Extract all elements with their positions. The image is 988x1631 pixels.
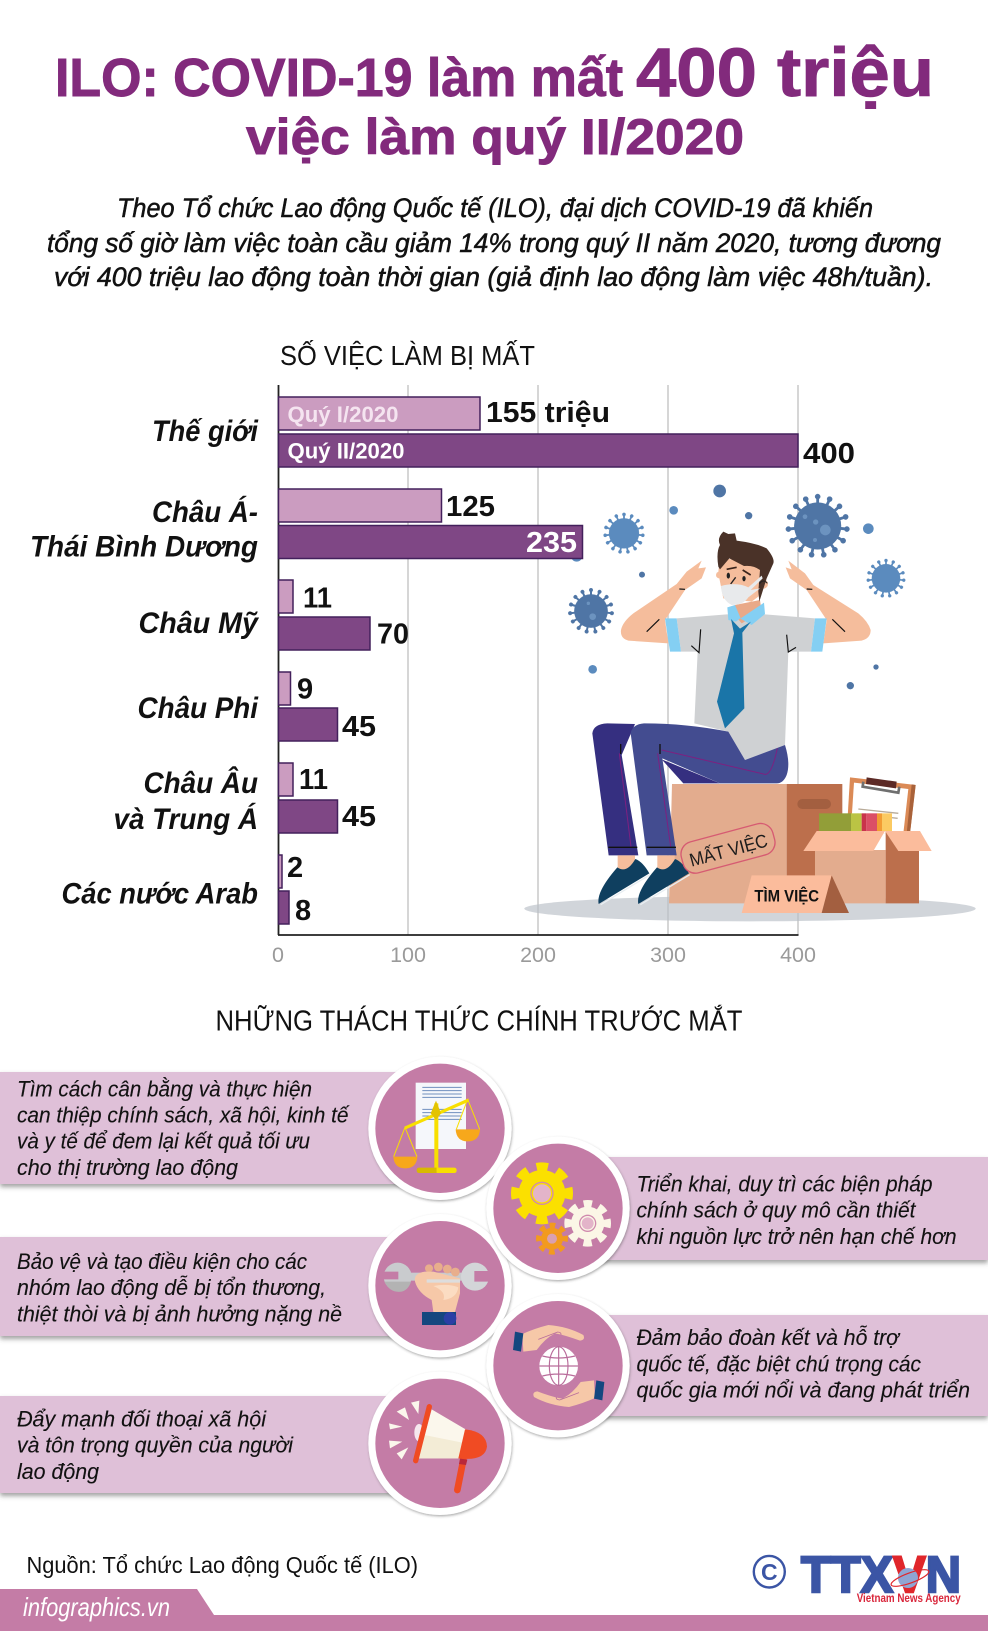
text: [17, 1249, 342, 1326]
challenge 3 (left): protect vulnerable groups: [0, 1237, 440, 1336]
axis tick labels: 100: [390, 943, 426, 967]
axis tick labels: 0: [272, 943, 284, 967]
bar values: 9: [297, 674, 313, 706]
title: ILO: COVID-19 làm mất: [55, 48, 623, 108]
axes: [278, 385, 798, 935]
bar values: 8: [295, 895, 311, 927]
stamp: mất việc: MẤT VIỆC: [687, 830, 770, 871]
intro text: Theo Tổ chức Lao động Quốc tế (ILO), đại dịch COVID-19 đã khiến: [117, 193, 873, 223]
region labels: [30, 415, 259, 910]
icon: hands around globe: [486, 1294, 630, 1437]
title: 400 triệu: [636, 34, 934, 111]
bar chart: [30, 385, 976, 967]
upper body: [621, 532, 871, 760]
front leg: [631, 723, 788, 855]
axis tick labels: [272, 943, 816, 967]
text: can thiệp chính sách, xã hội, kinh tế: [17, 1102, 350, 1128]
band: [0, 1237, 440, 1336]
text: và y tế để đem lại kết quả tối ưu: [17, 1128, 310, 1154]
axis tick labels: 400: [780, 943, 816, 967]
text: Đẩy mạnh đối thoại xã hội: [17, 1406, 267, 1432]
text: Triển khai, duy trì các biện pháp: [636, 1172, 932, 1196]
band: [0, 1072, 440, 1184]
bar values: 2: [287, 852, 303, 884]
text: Bảo vệ và tạo điều kiện cho các: [17, 1249, 307, 1274]
bar values: 125: [446, 491, 495, 523]
challenge 1 (left): balance: [0, 1072, 440, 1184]
region labels: Châu Âu: [144, 766, 258, 800]
text: lao động: [17, 1459, 99, 1484]
intro text: [47, 193, 941, 292]
text: [17, 1076, 350, 1180]
sign: tìm việc: [742, 875, 849, 913]
text: chính sách ở quy mô cần thiết: [636, 1198, 917, 1222]
logo: TTXVN: Vietnam News Agency: [857, 1593, 961, 1605]
region labels: Châu Á-: [152, 495, 258, 529]
sign: tìm việc: TÌM VIỆC: [754, 887, 819, 906]
title: việc làm quý II/2020: [246, 109, 744, 165]
footer band: [0, 1589, 988, 1631]
challenge 4 (right): international solidarity: [560, 1315, 988, 1416]
challenges heading: NHỮNG THÁCH THỨC CHÍNH TRƯỚC MẮT: [216, 1006, 742, 1038]
shoes: [618, 855, 635, 870]
site name: infographics.vn: [23, 1592, 170, 1622]
legend labels inside bars: Quý I/2020: [288, 402, 398, 427]
challenge 5 (left): social dialogue: [0, 1396, 440, 1493]
icon: hand gripping wrench: [368, 1214, 512, 1357]
bar values: [287, 397, 855, 927]
text: khi nguồn lực trở nên hạn chế hơn: [636, 1224, 956, 1249]
bars: Quý II: [278, 434, 798, 924]
text: Đảm bảo đoàn kết và hỗ trợ: [636, 1325, 901, 1350]
text: [17, 1406, 294, 1484]
legend labels inside bars: Quý II/2020: [288, 438, 404, 464]
icon: gears: [486, 1137, 630, 1280]
text: [636, 1172, 956, 1249]
legend labels inside bars: [288, 402, 404, 464]
text: quốc gia mới nổi và đang phát triển: [636, 1378, 970, 1402]
bar values: 11: [303, 582, 332, 614]
bar values: 11: [299, 764, 328, 796]
bar values: 235: [526, 527, 577, 559]
man: [592, 532, 871, 905]
challenge 2 (right): policy measures: [560, 1157, 988, 1260]
intro text: tổng số giờ làm việc toàn cầu giảm 14% trong quý II năm 2020, tương đương: [47, 228, 941, 258]
source: Nguồn: Tổ chức Lao động Quốc tế (ILO): [26, 1552, 418, 1578]
bar values: 400: [803, 438, 855, 470]
region labels: Thái Bình Dương: [30, 530, 258, 564]
logo: TTXVN: TTXVN: [801, 1546, 961, 1603]
icon: megaphone: [368, 1372, 512, 1515]
region labels: Châu Phi: [138, 692, 259, 725]
band: [560, 1315, 988, 1416]
boxes: [669, 777, 932, 903]
viruses: [568, 485, 905, 689]
text: và tôn trọng quyền của người: [17, 1432, 294, 1458]
bar values: 45: [342, 711, 376, 743]
text: [636, 1325, 970, 1402]
band: [0, 1396, 440, 1493]
chart heading: SỐ VIỆC LÀM BỊ MẤT: [280, 339, 535, 371]
region labels: Châu Mỹ: [138, 607, 259, 640]
text: Tìm cách cân bằng và thực hiện: [17, 1076, 312, 1102]
logo: TTXVN: C: [761, 1559, 778, 1585]
floor shadow: [524, 896, 976, 921]
text: nhóm lao động dễ bị tổn thương,: [17, 1275, 326, 1300]
region labels: Thế giới: [152, 415, 259, 448]
illustration: worried man with mask on boxes: [524, 485, 976, 921]
text: quốc tế, đặc biệt chú trọng các: [636, 1352, 921, 1376]
lower body: [592, 723, 638, 855]
region labels: và Trung Á: [114, 802, 258, 836]
axis tick labels: 300: [650, 943, 686, 967]
intro text: với 400 triệu lao động toàn thời gian (giả định lao động làm việc 48h/tuần).: [54, 262, 933, 292]
title: [55, 34, 934, 165]
text: cho thị trường lao động: [17, 1155, 238, 1180]
region labels: Các nước Arab: [62, 878, 258, 910]
axis tick labels: 200: [520, 943, 556, 967]
bar values: 45: [342, 801, 376, 833]
text: thiệt thòi và bị ảnh hưởng nặng nề: [17, 1302, 342, 1326]
bar values: 155 triệu: [486, 397, 610, 429]
bars: Quý I: [278, 397, 480, 888]
bar values: 70: [377, 618, 409, 650]
icon: scales and document: [368, 1057, 512, 1200]
band: [560, 1157, 988, 1260]
